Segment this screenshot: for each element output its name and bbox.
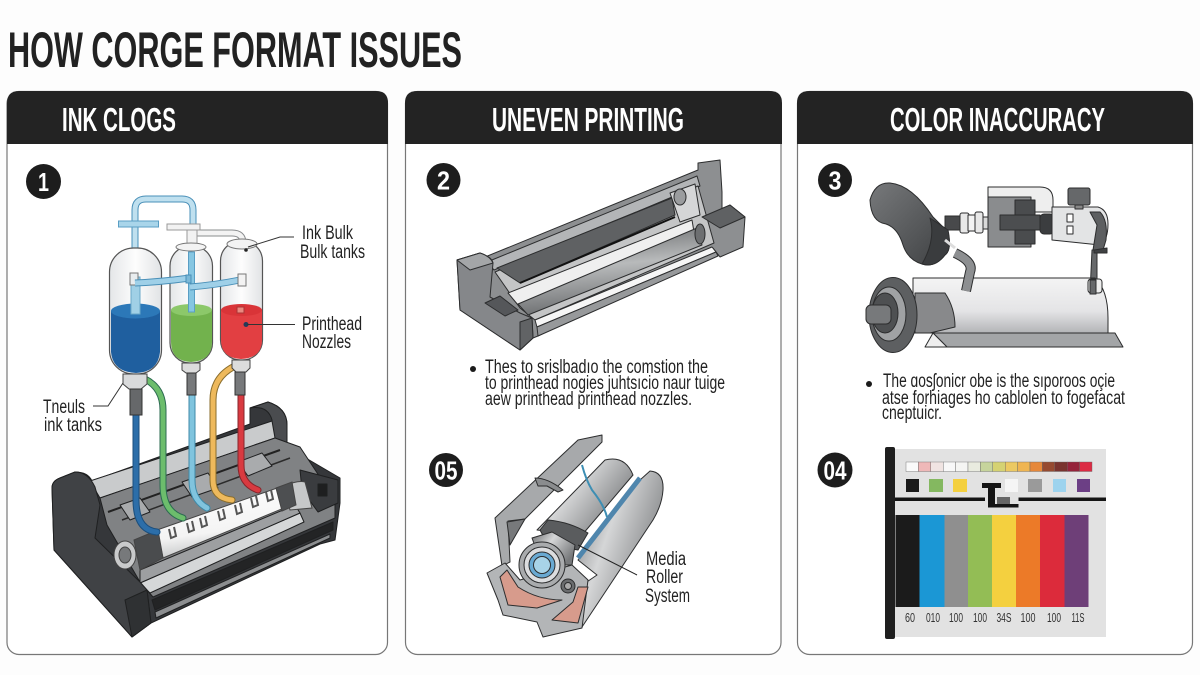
step number 3: 3 xyxy=(828,166,842,196)
text block: uneven printing bullet: Thes to srislbadıo the comstion the xyxy=(485,357,708,378)
card frame xyxy=(798,92,1192,654)
panel heading: INK CLOGS xyxy=(62,101,176,138)
illustration: green ink tank xyxy=(170,243,212,395)
illustration: red ink tank xyxy=(220,239,262,395)
bar value labels: 100 xyxy=(949,610,963,625)
bar value labels: 100 xyxy=(973,610,987,625)
step number 05: 05 xyxy=(434,456,458,486)
panel header bar xyxy=(7,91,388,144)
bar value labels: 100 xyxy=(1020,610,1036,625)
label: printhead nozzles: Nozzles xyxy=(302,332,351,353)
text block: uneven printing bullet xyxy=(470,357,725,410)
color swatches row xyxy=(906,479,1090,492)
illustration: print roller xyxy=(114,482,312,570)
text block: color inaccuracy bullet: The ɑosʃonicr obe is the sıporoos oçie xyxy=(883,371,1115,392)
label: ink tanks xyxy=(43,383,123,436)
label: media roller system: Roller xyxy=(646,567,684,588)
text block: uneven printing bullet: to printhead nogies juhtsıcio naur tuige xyxy=(485,373,725,394)
step number 1: 1 xyxy=(38,167,49,197)
text block: uneven printing bullet: aew printhead printhead nozzles. xyxy=(485,389,692,410)
step number 3 xyxy=(818,163,852,197)
bar value labels xyxy=(905,610,1085,625)
panel: color inaccuracy xyxy=(797,91,1193,654)
panel header bar xyxy=(797,91,1193,144)
step number 2 xyxy=(426,163,460,197)
step number 1 xyxy=(26,164,61,199)
illustration: print head assembly and drum xyxy=(866,183,1123,352)
label: ink bulk tanks xyxy=(248,223,365,263)
step number 04: 04 xyxy=(824,456,847,486)
label: media roller system: System xyxy=(645,586,690,607)
illustration: blue ink tank xyxy=(110,248,162,415)
registration mark and divider xyxy=(895,483,1106,508)
label: ink bulk tanks: Bulk tanks xyxy=(300,242,365,263)
color test chart xyxy=(885,447,1106,639)
text block: color inaccuracy bullet xyxy=(866,371,1126,424)
illustration: media roller system xyxy=(487,435,663,637)
label: ink tanks: Tneuls xyxy=(43,397,85,418)
bar value labels: 34S xyxy=(996,610,1012,625)
chart side bar xyxy=(885,447,895,639)
panel: uneven printing xyxy=(405,91,782,654)
card frame xyxy=(7,92,388,654)
panel header bar xyxy=(405,91,782,144)
label: media roller system: Media xyxy=(646,549,686,570)
illustration: colored ink tubes xyxy=(136,367,258,532)
label: ink bulk tanks: Ink Bulk xyxy=(302,223,353,244)
illustration: printer carriage base xyxy=(52,402,340,637)
chart background xyxy=(895,449,1106,637)
title: HOW CORGE FORMAT ISSUES xyxy=(8,22,462,78)
panel heading: UNEVEN PRINTING xyxy=(492,101,684,138)
card frame xyxy=(406,92,781,654)
color bars xyxy=(896,515,1088,607)
step number 2: 2 xyxy=(437,166,450,196)
label: ink tanks: ink tanks xyxy=(44,415,102,436)
bar value labels: 11S xyxy=(1072,610,1085,625)
label: printhead nozzles: Printhead xyxy=(302,314,362,335)
illustration: wide format printer xyxy=(457,160,745,350)
bar value labels: 100 xyxy=(1047,610,1061,625)
illustration: cross pipes inside tanks xyxy=(135,274,246,287)
panel: ink clogs xyxy=(7,91,388,654)
gradient strip of swatches xyxy=(906,462,1092,472)
bar value labels: 60 xyxy=(905,610,915,625)
text block: color inaccuracy bullet: atse forhiages ho cablolen to fogefacat xyxy=(882,388,1126,409)
label: media roller system xyxy=(578,545,690,607)
text block: color inaccuracy bullet: cneptuicr. xyxy=(882,403,942,424)
label: printhead nozzles xyxy=(247,314,362,353)
illustration: overhead pipes xyxy=(118,199,243,250)
bar value labels: 010 xyxy=(926,610,940,625)
